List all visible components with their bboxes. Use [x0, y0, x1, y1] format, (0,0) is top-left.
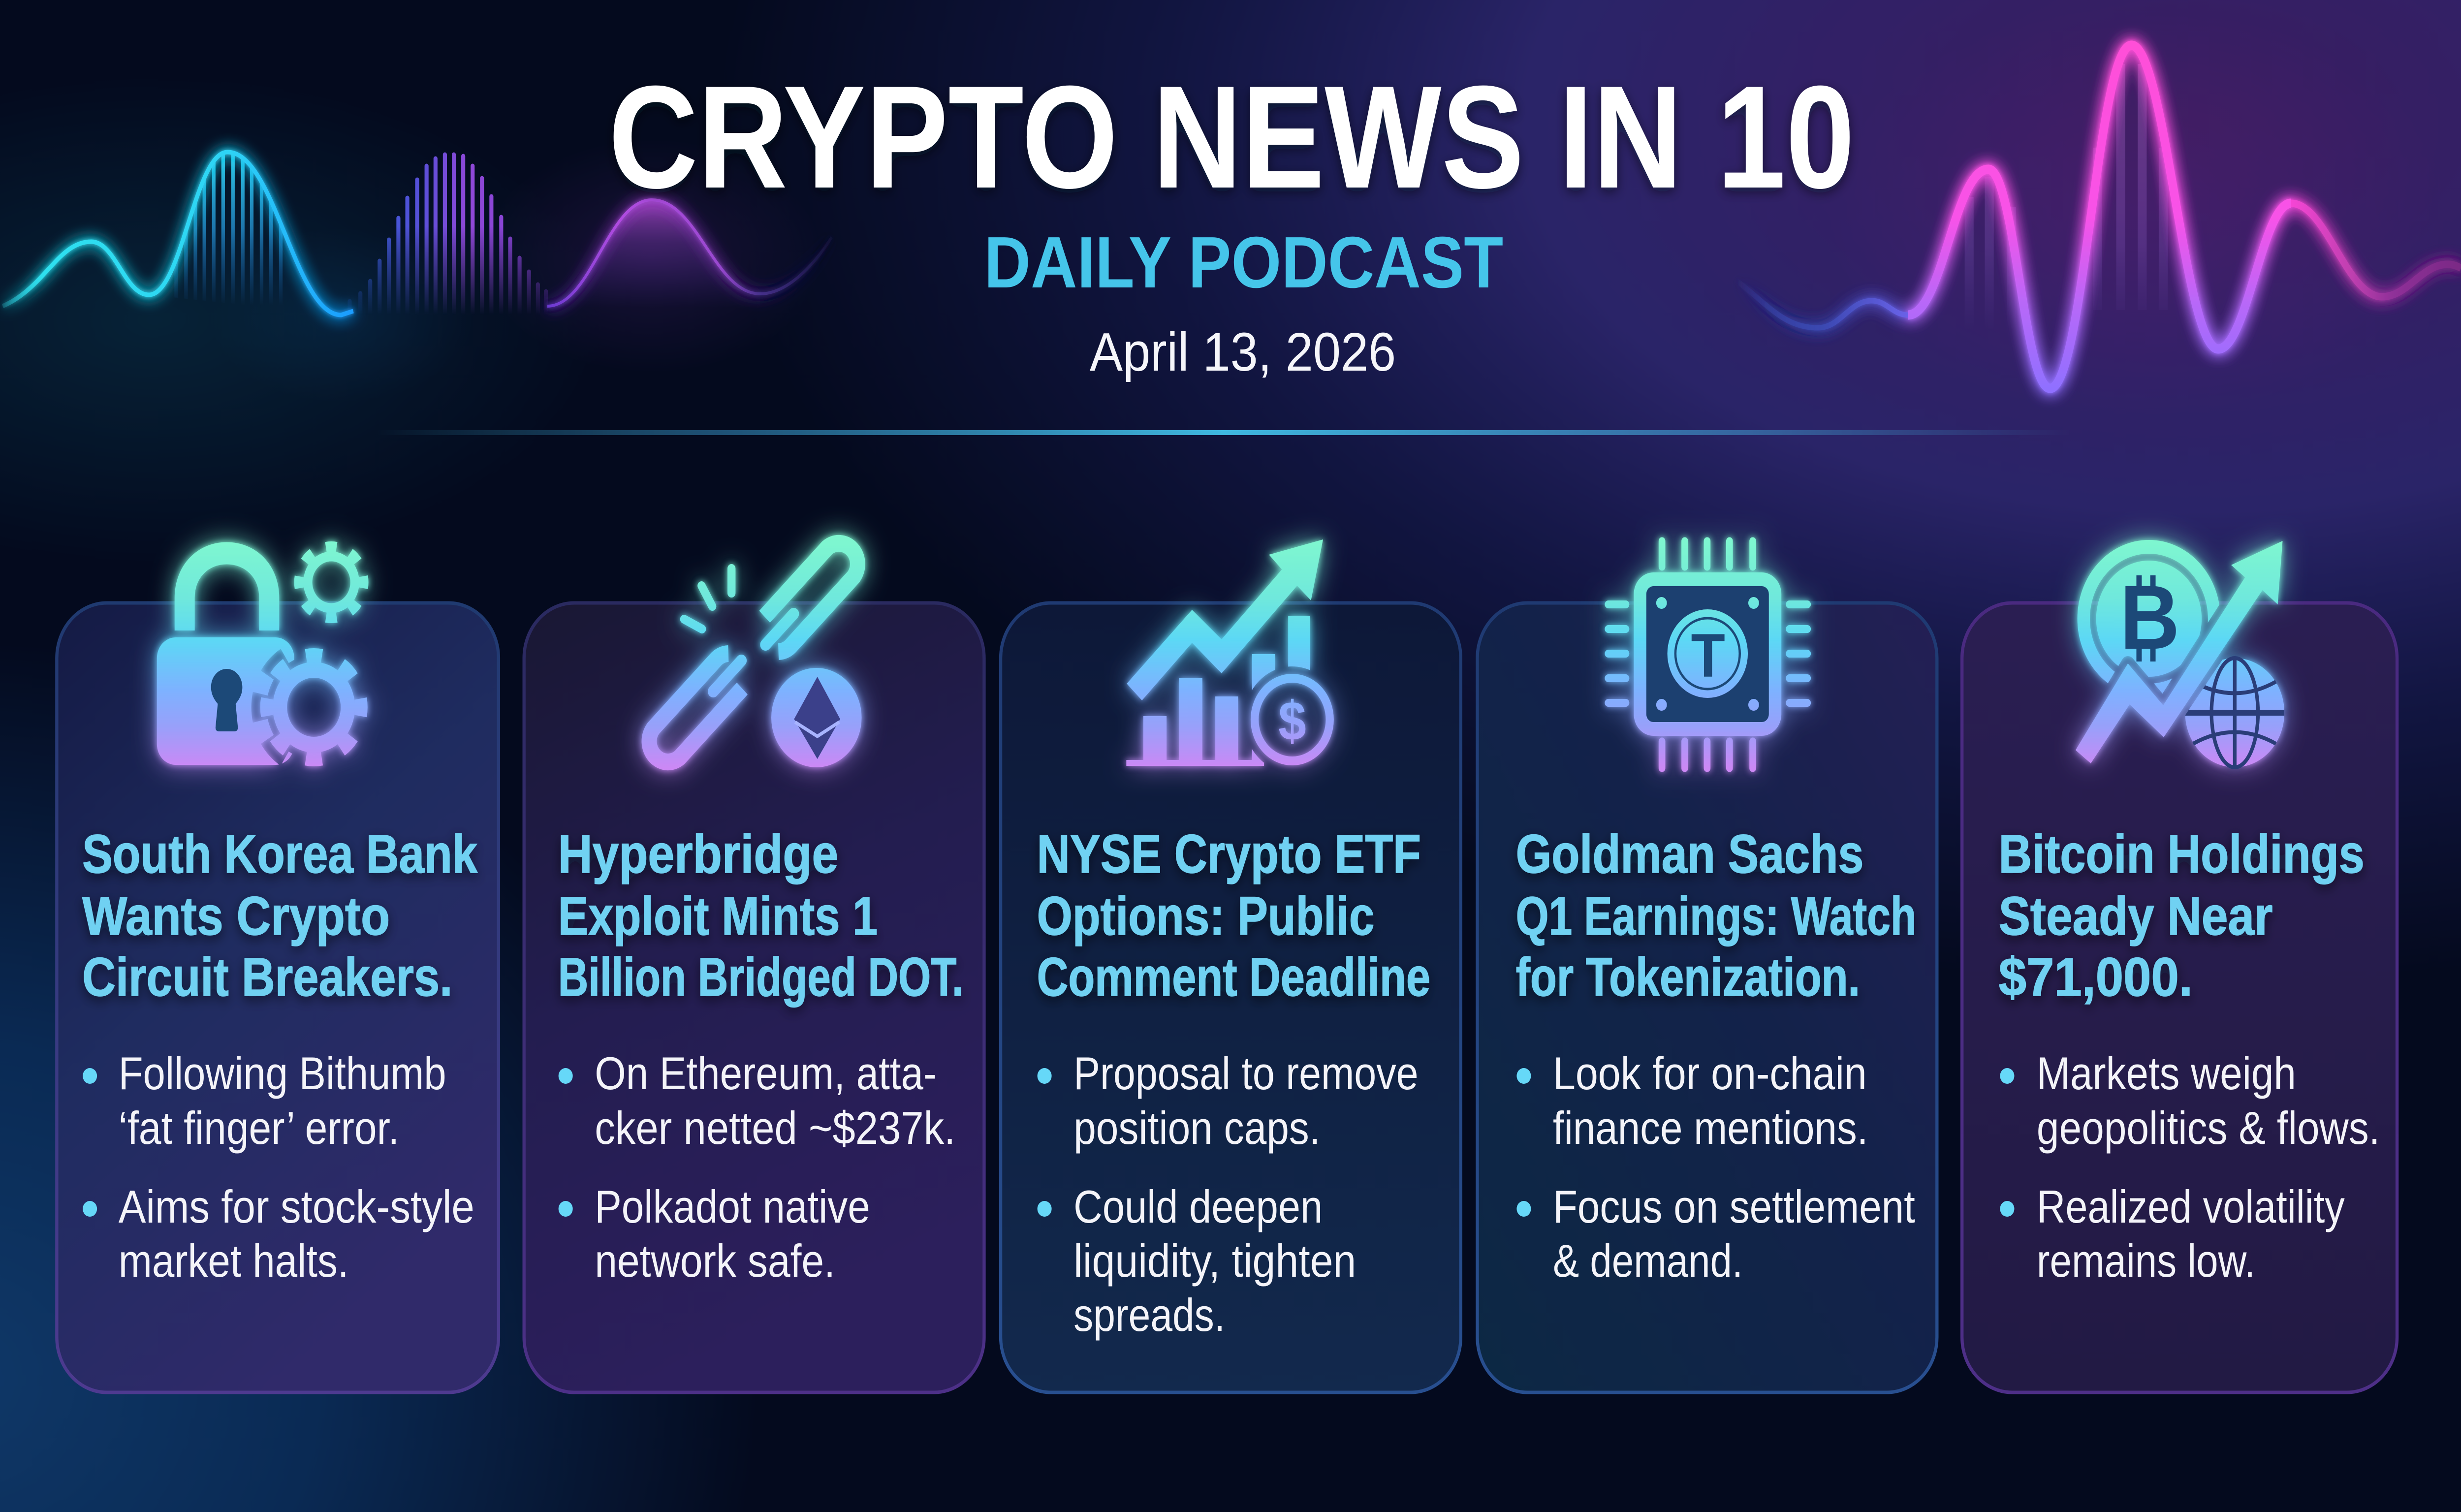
heading: Wants Crypto [82, 886, 390, 946]
panel: NYSE Crypto ETF [1001, 539, 1461, 1392]
heading: for Tokenization. [1516, 947, 1860, 1008]
bullet list: liquidity, tighten [1073, 1235, 1356, 1287]
date: April 13, 2026 [1090, 322, 1396, 382]
bullet list: ‘fat finger’ error. [119, 1102, 399, 1154]
heading: $71,000. [1999, 947, 2193, 1008]
heading: Hyperbridge [558, 824, 838, 884]
bullet list: Look for on-chain [1553, 1048, 1867, 1100]
bullet list: network safe. [595, 1235, 835, 1287]
bullet list: spreads. [1073, 1290, 1225, 1341]
panel: Hyperbridge [524, 543, 984, 1392]
heading [558, 824, 964, 1008]
icon: rising chart and dollar coin: $ [1278, 690, 1306, 752]
bullet list: Markets weigh [2037, 1048, 2296, 1100]
bullet list [1516, 1048, 1915, 1287]
icon: tokenized chip [1609, 541, 1807, 768]
bullet list [83, 1048, 474, 1287]
heading: Exploit Mints 1 [558, 886, 878, 946]
bullet list: position caps. [1073, 1102, 1321, 1154]
heading: NYSE Crypto ETF [1037, 824, 1421, 884]
heading: Steady Near [1999, 886, 2273, 946]
icon: broken chain and ether coin [649, 543, 862, 767]
subtitle: DAILY PODCAST [984, 221, 1503, 303]
heading: Goldman Sachs [1516, 824, 1863, 884]
panel: Bitcoin Holdings [1962, 541, 2397, 1392]
heading: Options: Public [1037, 886, 1375, 946]
title: CRYPTO NEWS IN 10 [608, 56, 1855, 219]
heading: Q1 Earnings: Watch [1516, 886, 1917, 946]
bullet list: remains low. [2037, 1235, 2255, 1287]
panel: South Korea Bank [57, 547, 499, 1392]
bullet list: finance mentions. [1553, 1102, 1868, 1154]
header divider [377, 430, 2070, 435]
bullet list [559, 1048, 955, 1287]
bullet list: Following Bithumb [119, 1048, 446, 1100]
bullet list [2000, 1048, 2380, 1287]
bullet list: & demand. [1553, 1235, 1743, 1287]
heading [1037, 824, 1430, 1008]
icon: tokenized chip: T [1691, 622, 1725, 690]
heading [1516, 824, 1917, 1008]
bullet list: Could deepen [1073, 1181, 1323, 1233]
bullet list: geopolitics & flows. [2037, 1102, 2380, 1154]
bullet list: market halts. [119, 1235, 349, 1287]
heading [1999, 824, 2365, 1008]
heading: Circuit Breakers. [82, 947, 452, 1008]
bullet list [1038, 1048, 1419, 1341]
right waveform [1735, 5, 2461, 418]
heading: South Korea Bank [82, 824, 478, 884]
bullet list: Focus on settlement [1553, 1181, 1915, 1233]
icon: bitcoin, arrow and globe [2076, 541, 2284, 767]
bullet list: On Ethereum, atta- [595, 1048, 937, 1100]
panel: Goldman Sachs [1477, 541, 1937, 1392]
icon: rising chart and dollar coin [1126, 539, 1330, 766]
heading: Bitcoin Holdings [1999, 824, 2365, 884]
icon: bitcoin, arrow and globe: B [2120, 567, 2179, 668]
bullet list: Proposal to remove [1073, 1048, 1419, 1100]
heading [82, 824, 478, 1008]
bullet list: Aims for stock-style [119, 1181, 474, 1233]
heading: Billion Bridged DOT. [558, 947, 964, 1008]
bullet list: Realized volatility [2037, 1181, 2345, 1233]
bullet list: cker netted ~$237k. [595, 1102, 955, 1154]
icon: padlock and gears [157, 547, 364, 765]
heading: Comment Deadline [1037, 947, 1430, 1008]
left waveform [0, 136, 833, 359]
bullet list: Polkadot native [595, 1181, 870, 1233]
